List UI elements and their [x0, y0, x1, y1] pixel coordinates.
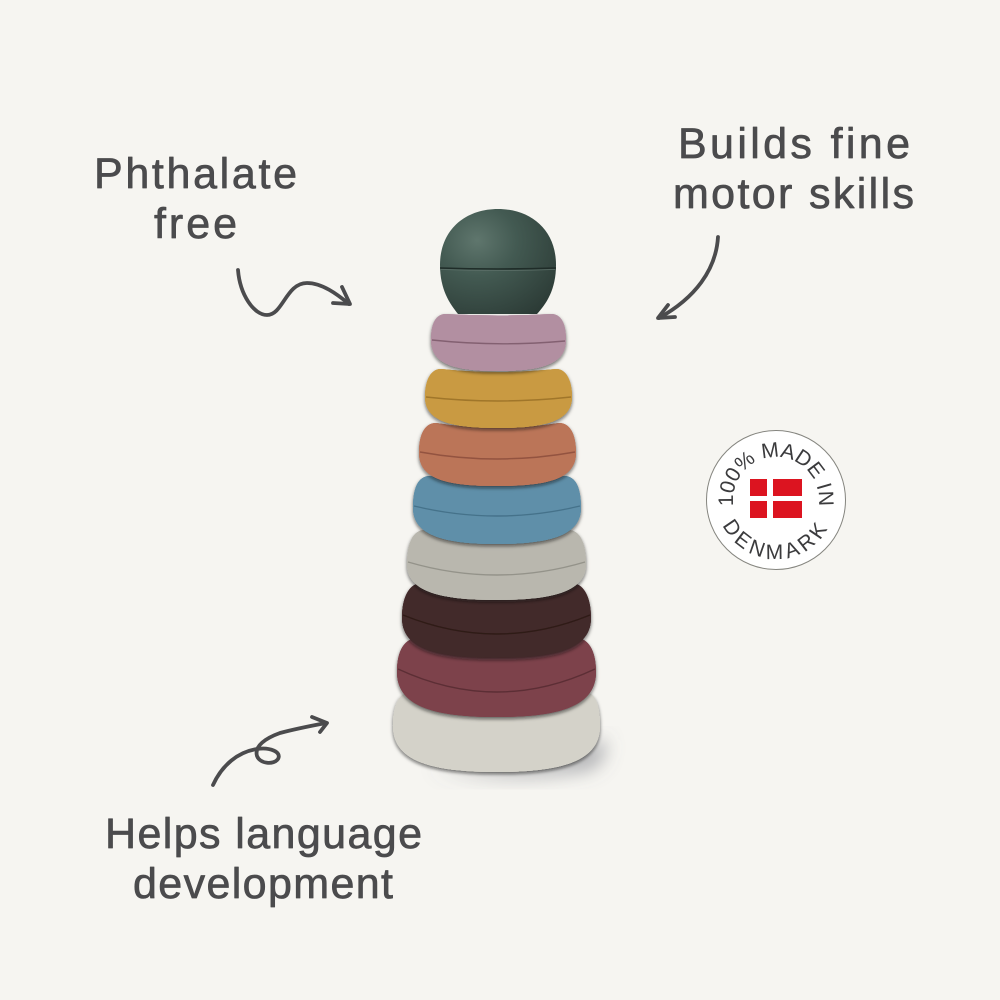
arrow: Builds fine motor skills to toy [658, 237, 718, 318]
ball: dark green top [440, 209, 556, 314]
badge text: bottom arc: DENMARK [723, 518, 828, 560]
label: Helps language development: development [133, 860, 393, 908]
label: Builds fine motor skills: motor skills [673, 170, 914, 218]
badge text: top arc: 100% MADE IN [718, 442, 834, 504]
badge: 100% made in Denmark [706, 430, 846, 570]
arrow: Phthalate free to toy [238, 270, 350, 315]
ring: mauve [431, 314, 566, 371]
ring: dark brown [402, 583, 591, 658]
ring: cream base [393, 692, 600, 772]
ring: terracotta [419, 423, 576, 486]
label: Phthalate free: free [154, 200, 237, 248]
product: stacking rings toy [393, 209, 605, 778]
ring: maroon [397, 638, 596, 717]
ring: mustard [425, 369, 572, 428]
label: Helps language development: Helps language [105, 810, 422, 858]
ring: blue [413, 476, 581, 544]
ring: grey [407, 530, 586, 600]
arrow: Helps language development to toy [213, 717, 327, 785]
label: Builds fine motor skills: Builds fine [678, 120, 910, 168]
toy cast shadow [430, 738, 605, 778]
label: Phthalate free: Phthalate [94, 150, 297, 198]
icon: Danish flag [750, 479, 802, 518]
